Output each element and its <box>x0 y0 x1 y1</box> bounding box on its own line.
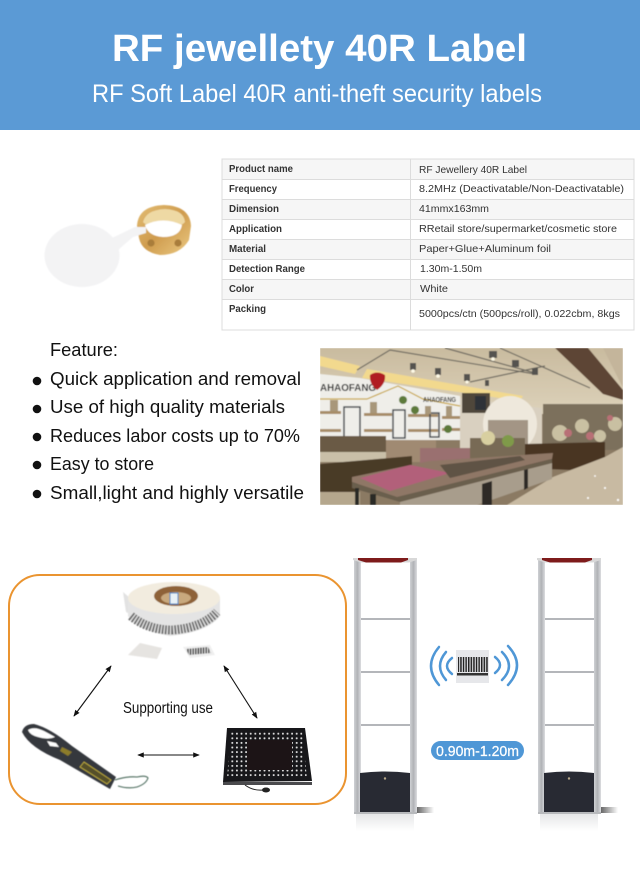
header banner <box>0 0 640 130</box>
feature heading: Feature: <box>50 339 118 360</box>
row: frequency <box>229 183 624 195</box>
row: detection range: Detection Range <box>229 264 305 275</box>
row: frequency: Frequency <box>229 184 277 195</box>
row: detection range: 1.30m-1.50m <box>420 263 482 275</box>
icon: deactivator pad <box>223 728 312 792</box>
row: color: Color <box>229 284 254 295</box>
panel: supporting use <box>9 575 346 804</box>
arrow: roll to pad <box>224 666 257 718</box>
feature item 2: Use of high quality materials <box>50 396 285 417</box>
row: color: White <box>420 283 448 295</box>
row: material: Paper+Glue+Aluminum foil <box>419 243 551 255</box>
row: product name <box>229 164 527 176</box>
specification table <box>222 159 634 330</box>
signal waves left <box>431 647 452 685</box>
row: dimension <box>229 203 489 215</box>
row: color <box>229 283 448 295</box>
row: application: Application <box>229 224 282 235</box>
icon: barcode label <box>183 645 215 658</box>
icon: handheld detector wand <box>22 724 148 789</box>
row: frequency: 8.2MHz (Deactivatable/Non-Deactivatable) <box>419 183 624 195</box>
row: detection range <box>229 263 482 275</box>
row: packing <box>229 304 620 320</box>
row: dimension: 41mmx163mm <box>419 203 489 215</box>
icon: label roll <box>123 582 220 659</box>
store photo: AHAOFANG <box>423 395 456 404</box>
row: material <box>229 243 551 255</box>
product photo: label on gold ring <box>44 205 191 287</box>
distance badge: 0.90m-1.20m <box>436 743 519 760</box>
feature item 1: Quick application and removal <box>50 368 301 389</box>
row: application: RRetail store/supermarket/cosmetic store <box>419 223 617 235</box>
row: product name: Product name <box>229 164 293 175</box>
icon: barcode tag with signal waves <box>431 646 517 685</box>
row: product name: RF Jewellery 40R Label <box>419 164 527 176</box>
store photo: AHAOFANG <box>320 382 376 394</box>
title: RF jewellety 40R Label <box>112 28 527 70</box>
row: dimension: Dimension <box>229 204 279 215</box>
row: material: Material <box>229 244 266 255</box>
icon: clear label <box>128 643 162 659</box>
subtitle: RF Soft Label 40R anti-theft security labels <box>92 80 542 108</box>
spotlights <box>410 351 538 386</box>
feature list <box>33 339 304 503</box>
feature item 5: Small,light and highly versatile <box>50 482 304 503</box>
arrow: roll to wand <box>74 666 111 716</box>
feature item 4: Easy to store <box>50 453 154 474</box>
label: supporting use: Supporting use <box>123 700 213 717</box>
security gate left <box>353 558 434 831</box>
row: packing: Packing <box>229 304 266 315</box>
barcode tag <box>456 650 489 683</box>
security gate right <box>537 558 618 831</box>
store photo <box>320 348 623 505</box>
row: packing: 5000pcs/ctn (500pcs/roll), 0.022cbm, 8kgs <box>419 308 620 320</box>
feature item 3: Reduces labor costs up to 70% <box>50 425 300 446</box>
arrow: wand to pad <box>138 754 199 756</box>
row: application <box>229 223 617 235</box>
signal waves right <box>495 646 517 685</box>
